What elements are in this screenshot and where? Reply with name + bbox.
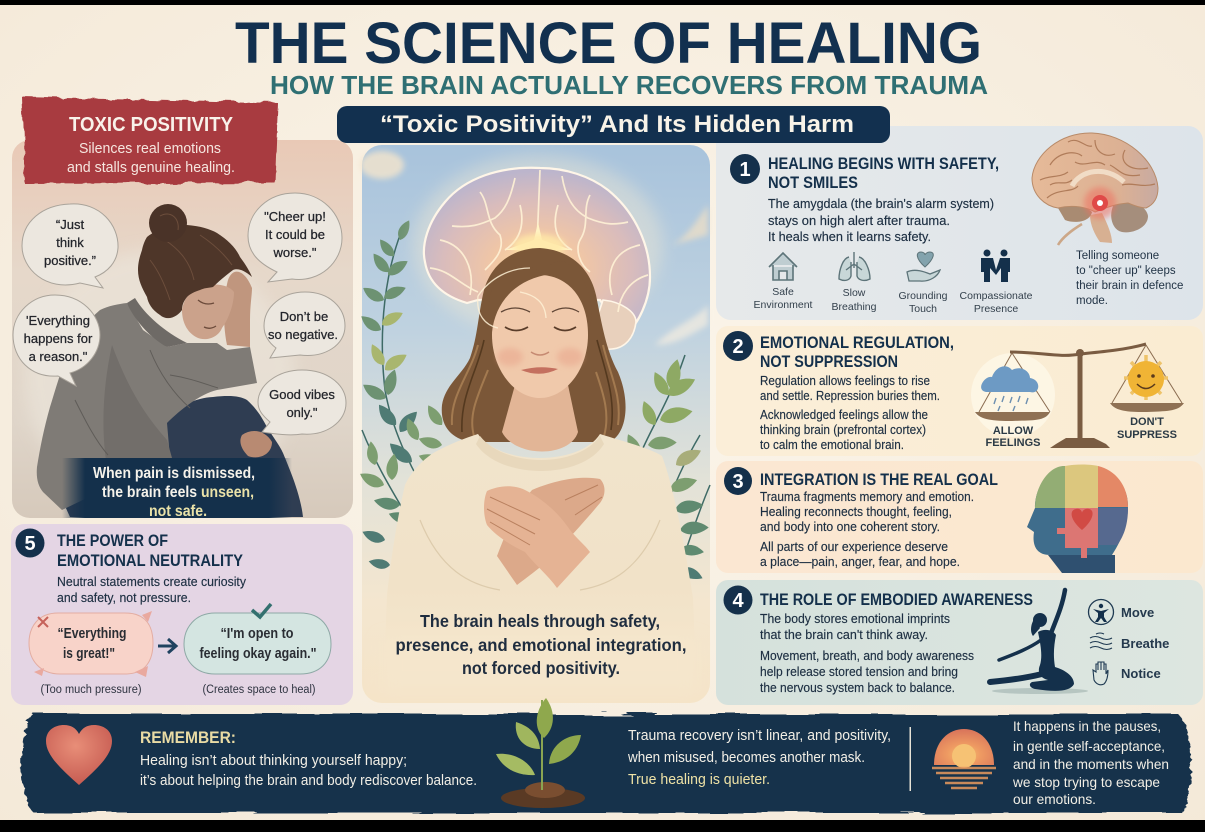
speech bubble: just think positive: “Just [56, 217, 84, 232]
speech bubble: cheer up [248, 193, 342, 282]
body 5 [57, 575, 247, 605]
body 4: Movement, breath, and body awareness [760, 649, 974, 663]
illustration: puzzle head [1027, 464, 1128, 573]
body 2: to calm the emotional brain. [760, 438, 904, 452]
icon: house: Safe [772, 286, 794, 298]
remember text: Healing isn’t about thinking yourself happy; [140, 753, 407, 769]
body 3: and body into one coherent story. [760, 520, 940, 534]
text: pauses: It happens in the pauses, [1013, 718, 1161, 734]
body 2 [760, 374, 940, 452]
speech bubble: just think positive: think [56, 235, 84, 250]
speech bubble: good vibes only [258, 370, 346, 435]
heading 2: EMOTIONAL REGULATION, [760, 333, 954, 352]
caption: when pain is dismissed: the brain feels unseen, [102, 484, 254, 501]
heading 1: NOT SMILES [768, 173, 858, 192]
heading 1 [768, 154, 999, 192]
speech bubble: everything happens: 'Everything [26, 313, 90, 328]
caption: when pain is dismissed: When pain is dismissed, [93, 465, 255, 482]
heading 4: THE ROLE OF EMBODIED AWARENESS [760, 590, 1033, 609]
illustration: balance scale [971, 344, 1184, 449]
icon: move [1088, 600, 1154, 624]
icon: breathe [1090, 633, 1169, 651]
bubble: open to feeling okay [184, 604, 331, 674]
illustration: brain with amygdala [1032, 133, 1158, 245]
body 3: All parts of our experience deserve [760, 540, 948, 554]
caption: when pain is dismissed: not safe. [149, 503, 207, 520]
body 3: Healing reconnects thought, feeling, [760, 505, 952, 519]
icon: notice [1093, 662, 1161, 685]
number 3 [724, 467, 752, 495]
number 1 [730, 154, 760, 184]
banner: remember [21, 698, 1191, 813]
body 3 [760, 490, 974, 569]
subtitle: HOW THE BRAIN ACTUALLY RECOVERS FROM TRAUMA [270, 70, 988, 100]
remember text: it’s about helping the brain and body rediscover balance. [140, 773, 477, 789]
title: THE SCIENCE OF HEALING [235, 11, 982, 76]
icon: sunset [932, 729, 996, 788]
note: telling someone: their brain in defence [1076, 280, 1183, 292]
panel 2: regulation [716, 326, 1203, 456]
pan: allow feelings: FEELINGS [985, 437, 1041, 449]
panel 1: safety [716, 126, 1203, 320]
speech bubble: everything happens [13, 295, 100, 386]
text: pauses [1012, 718, 1169, 807]
body 4: help release stored tension and bring [760, 665, 958, 679]
text: pauses: and in the moments when [1013, 756, 1169, 772]
icon: lungs [832, 252, 877, 313]
speech bubble: everything happens: happens for [24, 331, 93, 346]
speech bubble: cheer up: worse." [273, 245, 317, 260]
speech bubble: don't be so negative: Don’t be [280, 309, 328, 324]
pan: allow feelings: ALLOW [993, 425, 1034, 437]
speech bubble: don't be so negative: so negative. [268, 327, 338, 342]
panel: toxic positivity [12, 140, 353, 520]
body 1 [768, 197, 994, 244]
bubble: open to feeling okay: feeling okay again." [200, 646, 316, 662]
icon: house [754, 253, 813, 311]
icon: move: Move [1121, 605, 1154, 620]
heading 2: NOT SUPPRESSION [760, 352, 898, 371]
body 1: It heals when it learns safety. [768, 230, 931, 244]
speech bubble: cheer up: It could be [265, 227, 325, 242]
speech bubble: just think positive [22, 204, 118, 288]
body 4: The body stores emotional imprints [760, 612, 950, 626]
banner: toxic positivity torn label: Silences real emotions [79, 141, 221, 157]
number 5 [16, 528, 44, 558]
icon: two people: Presence [974, 303, 1018, 315]
pan: allow feelings [975, 366, 1050, 449]
panel 3: integration [716, 461, 1203, 573]
speech bubble: just think positive: positive.” [44, 253, 96, 268]
caption: creates space: (Creates space to heal) [202, 684, 316, 696]
body 5: and safety, not pressure. [57, 591, 191, 605]
note: telling someone: Telling someone [1076, 250, 1159, 262]
text: trauma recovery [627, 728, 891, 788]
speech bubble: good vibes only: only." [286, 405, 318, 420]
illustration: distressed woman [25, 204, 303, 517]
caption: when pain is dismissed [62, 458, 292, 520]
foliage [357, 218, 710, 590]
caption: brain heals: not forced positivity. [462, 658, 620, 678]
arrow [158, 639, 176, 653]
icon: heart in hand [898, 252, 948, 315]
icon: breathe: Breathe [1121, 636, 1169, 651]
note: telling someone: to "cheer up" keeps [1076, 265, 1176, 277]
banner: toxic positivity torn label: and stalls genuine healing. [67, 160, 235, 176]
text: pauses: we stop trying to escape [1012, 774, 1160, 790]
icon: heart in hand: Touch [909, 303, 937, 315]
banner: toxic positivity torn label: TOXIC POSITIVITY [69, 114, 234, 136]
body 3: a place—pain, anger, fear, and hope. [760, 555, 960, 569]
icon: two people: Compassionate [960, 290, 1033, 302]
panel 5: emotional neutrality [11, 524, 353, 705]
bubble: everything is great [29, 611, 153, 677]
text: trauma recovery: when misused, becomes another mask. [627, 750, 865, 766]
pan: don't suppress [1110, 355, 1184, 441]
body 4 [760, 612, 974, 695]
note: telling someone: mode. [1076, 295, 1108, 307]
body 1: stays on high alert after trauma. [768, 214, 950, 228]
number 4: 4 [732, 590, 744, 612]
glowing brain halo [413, 155, 663, 349]
remember text [140, 728, 477, 789]
panel 4: embodied awareness [716, 580, 1203, 705]
icon: lungs: Slow [843, 287, 866, 299]
icon: lungs: Breathing [832, 301, 877, 313]
text: pauses: in gentle self-acceptance, [1013, 738, 1165, 754]
note: telling someone [1076, 250, 1183, 307]
heading pill: “Toxic Positivity” And Its Hidden Harm [380, 111, 854, 138]
crossed hands [484, 478, 604, 588]
speech bubble: everything happens: a reason." [29, 349, 88, 364]
icon: house: Environment [754, 299, 813, 311]
bubble: everything is great: is great!" [63, 646, 115, 662]
body 4: that the brain can't think away. [760, 628, 928, 642]
number 4 [724, 586, 752, 614]
icon: sprout [496, 698, 585, 808]
caption: brain heals [396, 611, 686, 678]
speech bubble: don't be so negative [264, 292, 345, 358]
icon: notice: Notice [1121, 666, 1161, 681]
number 5: 5 [24, 533, 36, 555]
caption: brain heals: The brain heals through safety, [420, 611, 660, 631]
heading pill [337, 106, 890, 143]
bubble: everything is great: “Everything [58, 626, 126, 642]
pan: don't suppress: DON'T [1130, 416, 1164, 428]
number 1: 1 [739, 159, 751, 181]
icon: heart in hand: Grounding [898, 290, 948, 302]
body 2: and settle. Repression buries them. [760, 389, 940, 403]
pan: don't suppress: SUPPRESS [1117, 429, 1177, 441]
text: trauma recovery: Trauma recovery isn’t linear, and positivity, [628, 728, 891, 744]
number 2: 2 [732, 336, 744, 358]
heading 1: HEALING BEGINS WITH SAFETY, [768, 154, 999, 173]
body 5: Neutral statements create curiosity [57, 575, 247, 589]
panel: central healing illustration [357, 145, 710, 703]
speech bubble: cheer up: "Cheer up! [264, 209, 326, 224]
banner: toxic positivity torn label [22, 97, 278, 184]
icon: two people [960, 250, 1033, 315]
number 3: 3 [732, 471, 744, 493]
body 1: The amygdala (the brain's alarm system) [768, 197, 994, 211]
speech bubble: good vibes only: Good vibes [269, 387, 335, 402]
body 2: Regulation allows feelings to rise [760, 374, 930, 388]
body 3: Trauma fragments memory and emotion. [760, 490, 974, 504]
body 2: thinking brain (prefrontal cortex) [760, 423, 926, 437]
healing woman [383, 248, 697, 690]
heading 5: EMOTIONAL NEUTRALITY [57, 551, 244, 570]
body 4: the nervous system back to balance. [760, 681, 955, 695]
heading 3: INTEGRATION IS THE REAL GOAL [760, 470, 998, 489]
text: trauma recovery: True healing is quieter. [628, 772, 770, 788]
remember text: REMEMBER: [140, 728, 236, 747]
text: pauses: our emotions. [1013, 791, 1096, 807]
body 2: Acknowledged feelings allow the [760, 408, 928, 422]
bubble: open to feeling okay: “I'm open to [220, 626, 294, 642]
caption: brain heals: presence, and emotional integration, [396, 635, 686, 655]
heading 2 [760, 333, 954, 371]
number 2 [723, 331, 753, 361]
heading 5: THE POWER OF [57, 531, 168, 550]
heading 5 [57, 531, 244, 570]
illustration: dancer silhouette [990, 590, 1088, 694]
caption: too much pressure: (Too much pressure) [40, 684, 142, 696]
icon: heart [46, 725, 112, 785]
